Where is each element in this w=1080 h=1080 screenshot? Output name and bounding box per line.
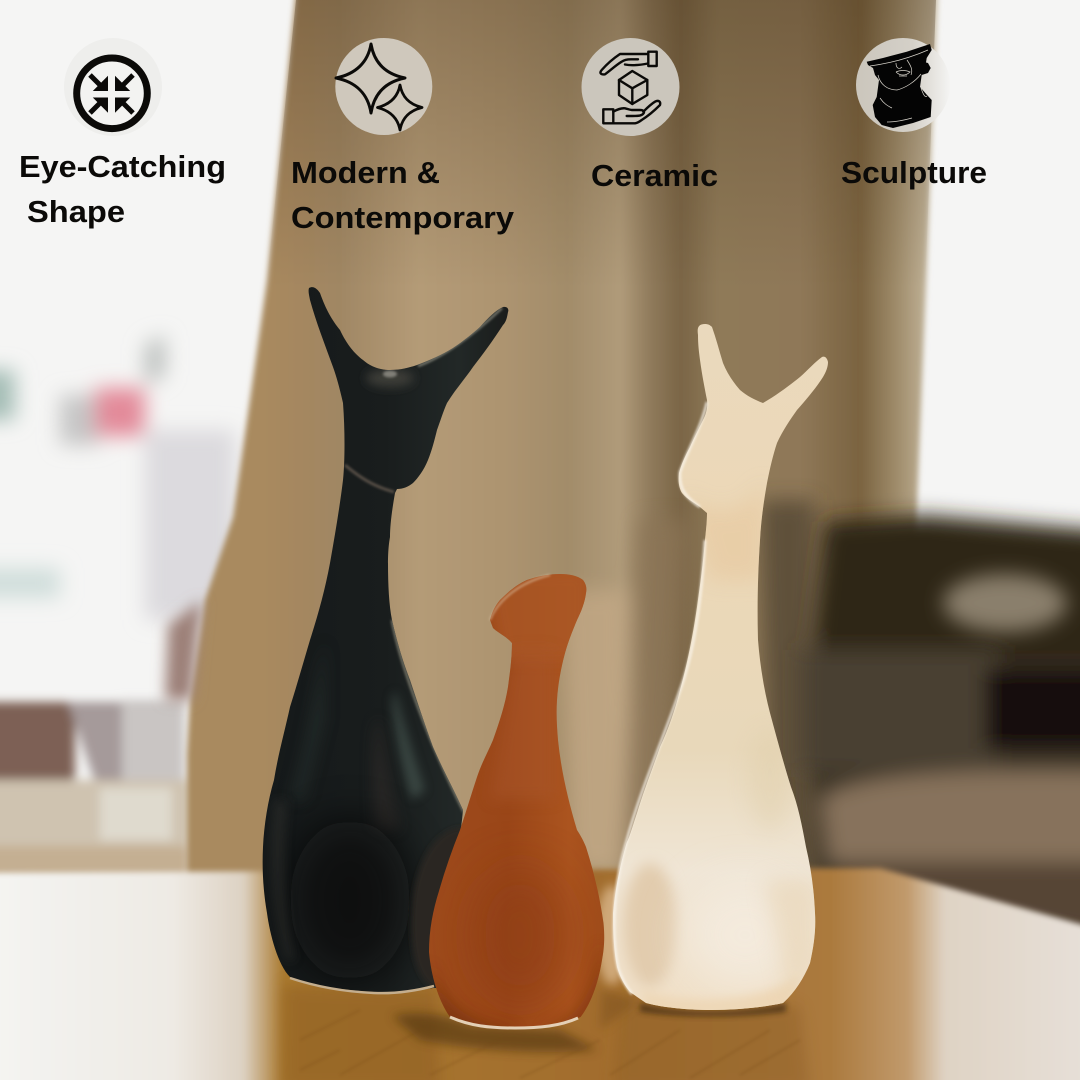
wooden table: [0, 868, 1080, 1080]
label: Eye-Catching Shape: Eye-Catching: [19, 149, 226, 184]
curtain: [187, 0, 938, 900]
left window blur: [0, 335, 235, 620]
feature: sculpture: [841, 38, 987, 190]
label: Modern & Contemporary: [291, 155, 515, 235]
figurine: black: [263, 287, 508, 993]
feature: eye-catching shape: [19, 38, 226, 229]
icon: bust: [856, 38, 950, 132]
label: Modern & Contemporary: Modern &: [291, 155, 440, 190]
icon: hands holding cube: [582, 38, 680, 136]
icon: inward arrows: [64, 38, 162, 136]
icon: sparkles: [335, 38, 432, 135]
figurine: terracotta: [429, 570, 610, 1045]
sofa: [800, 515, 1080, 950]
mauve window edge: [165, 600, 202, 700]
feature: modern and contemporary: [291, 38, 515, 235]
feature: ceramic: [582, 38, 718, 193]
label: Sculpture: Sculpture: [841, 155, 987, 190]
label: Eye-Catching Shape: [19, 149, 226, 229]
figurine: cream: [613, 324, 828, 1015]
label: Eye-Catching Shape: Shape: [27, 194, 125, 229]
label: Modern & Contemporary: Contemporary: [291, 200, 515, 235]
table reflections: [282, 985, 810, 1080]
label: Ceramic: Ceramic: [591, 158, 718, 193]
